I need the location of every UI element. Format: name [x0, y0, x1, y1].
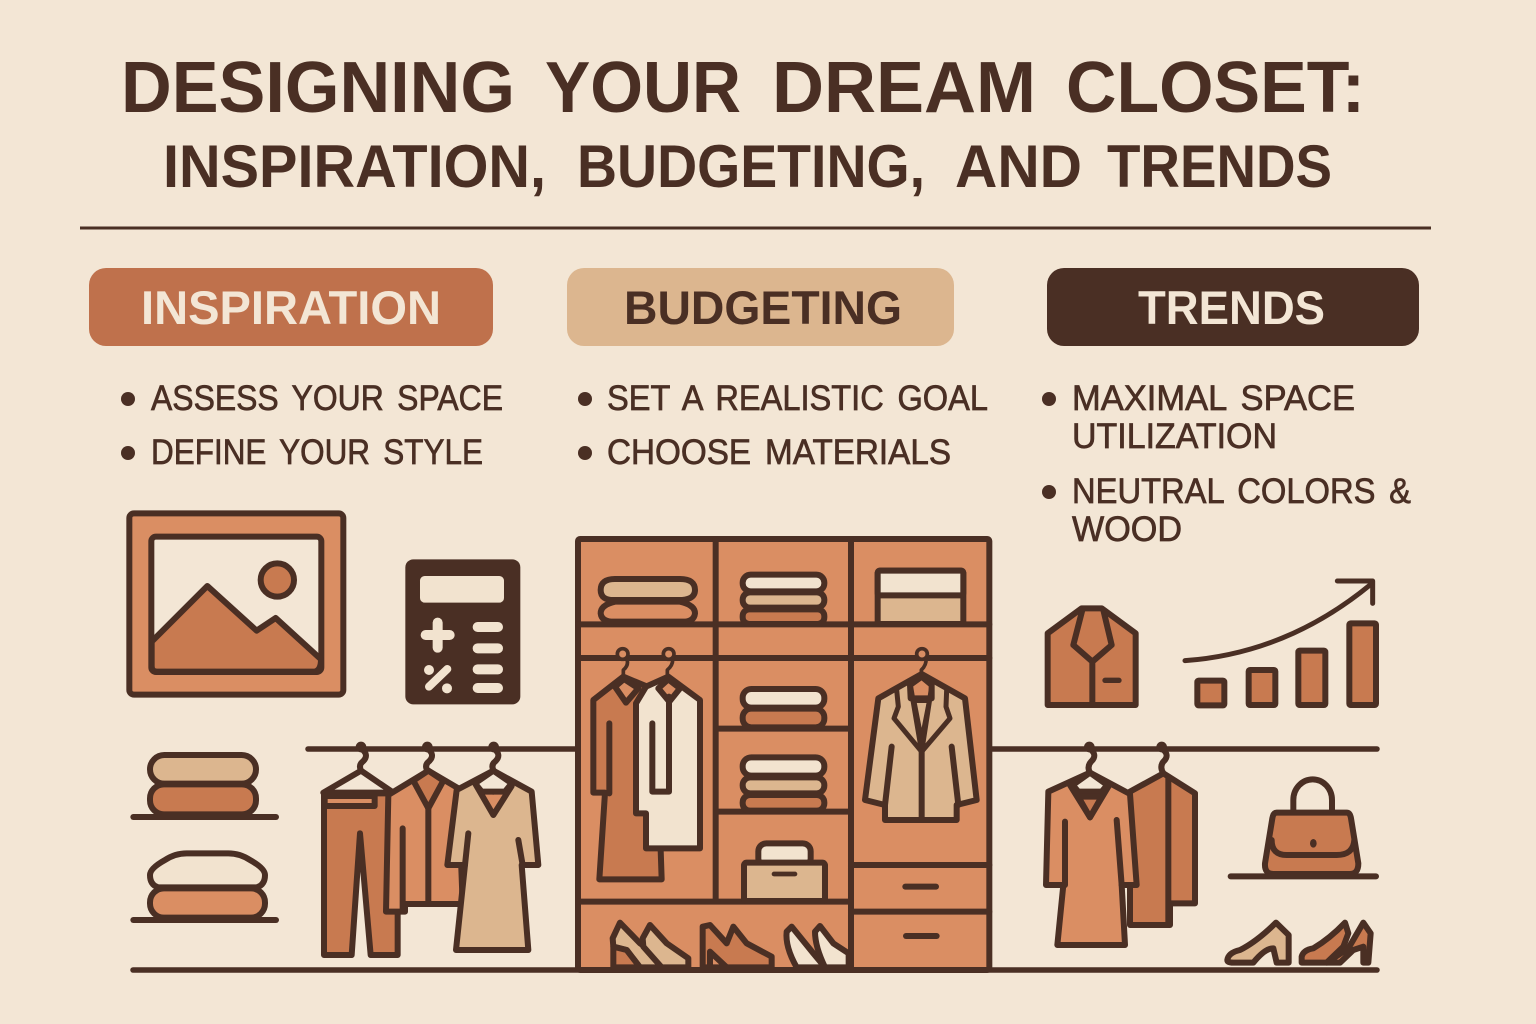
text block: trends bullets: [1042, 379, 1411, 549]
panel: trends heading: [1047, 268, 1419, 346]
panel: inspiration heading: INSPIRATION: [141, 281, 441, 334]
icon: blazer: [1048, 608, 1136, 705]
hanging rod: [308, 746, 1377, 752]
icon: calculator: [405, 559, 520, 704]
icon: folded stack lower: [743, 757, 824, 811]
wardrobe: [578, 539, 989, 970]
icon: hanging coat: [1130, 742, 1195, 925]
text block: budgeting bullets: CHOOSE MATERIALS: [607, 433, 951, 472]
icon: storage box top: [878, 571, 963, 624]
icon: hanging blazer: [865, 649, 977, 820]
text block: inspiration bullets: DEFINE YOUR STYLE: [151, 433, 483, 472]
title: BUDGETING,: [577, 133, 925, 200]
text block: budgeting bullets: [578, 379, 988, 472]
title: INSPIRATION,: [163, 133, 546, 200]
panel: budgeting heading: BUDGETING: [624, 281, 902, 334]
icon: picture frame: [129, 513, 343, 695]
text block: inspiration bullets: [121, 379, 503, 472]
panel: budgeting heading: [567, 268, 954, 346]
floor line: [133, 967, 1377, 973]
icon: hanging long dress: [1046, 742, 1137, 945]
text block: trends bullets: UTILIZATION: [1072, 417, 1277, 456]
icon: wardrobe drawer handles: [905, 887, 937, 936]
title: DESIGNING: [121, 48, 515, 128]
icon: folded stack middle: [743, 689, 824, 727]
icon: hanging dress and coat: [593, 649, 700, 879]
title: YOUR: [545, 48, 741, 128]
text block: trends bullets: NEUTRAL COLORS &: [1072, 472, 1411, 511]
icon: hanging dress: [447, 742, 538, 950]
icon: beige heel: [1227, 923, 1289, 963]
icon: folded clothes lower: [133, 853, 276, 920]
icon: handbag: [1231, 779, 1376, 876]
text block: budgeting bullets: SET A REALISTIC GOAL: [607, 379, 988, 418]
chart: rising bars with arrow: [1185, 581, 1376, 705]
icon: folded stack top: [743, 575, 824, 624]
title: DREAM: [772, 48, 1036, 128]
title: AND: [955, 133, 1082, 200]
icon: hanging jacket: [386, 742, 463, 912]
text block: trends bullets: WOOD: [1072, 510, 1182, 549]
icon: hanging pants: [323, 742, 398, 955]
panel: wardrobe cabinet: [578, 539, 989, 970]
panel: inspiration heading: [89, 268, 493, 346]
left illustrations: [129, 513, 538, 955]
right illustrations: [1046, 581, 1376, 963]
title: CLOSET:: [1066, 48, 1365, 128]
title: [121, 48, 1365, 200]
title: TRENDS: [1107, 133, 1332, 200]
text block: trends bullets: MAXIMAL SPACE: [1072, 379, 1355, 418]
icon: wardrobe shoes: [613, 923, 849, 967]
text block: inspiration bullets: ASSESS YOUR SPACE: [151, 379, 503, 418]
icon: folded clothes upper: [133, 755, 276, 817]
icon: folded blankets: [601, 579, 695, 622]
icon: storage basket: [744, 843, 825, 901]
icon: brown heels: [1302, 923, 1371, 963]
panel: trends heading: TRENDS: [1138, 281, 1325, 334]
